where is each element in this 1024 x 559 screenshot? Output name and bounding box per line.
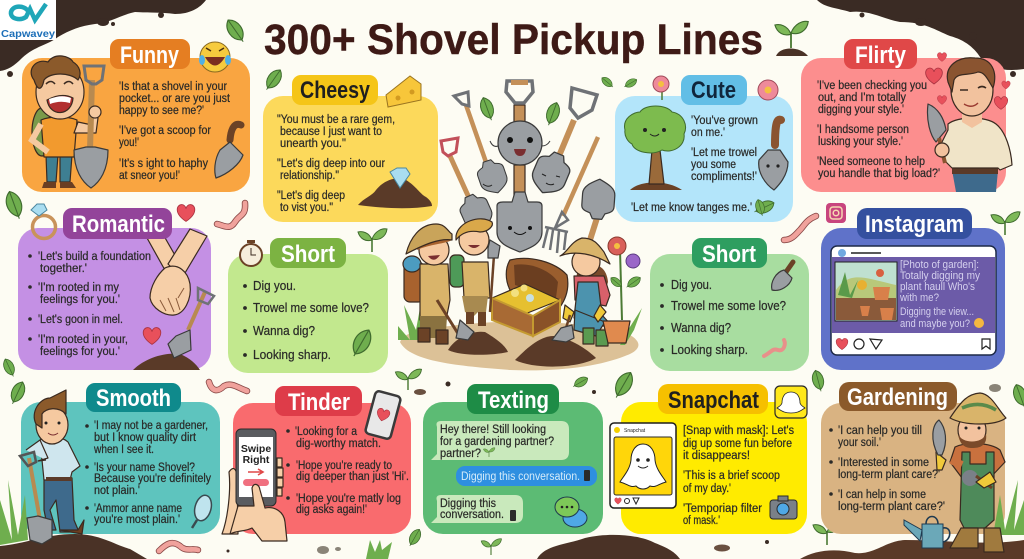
panel: Cheesy (263, 75, 438, 222)
card: Snapchat post (610, 423, 676, 508)
text: Cheesy lines (277, 114, 395, 214)
icon: camera (770, 496, 797, 519)
text: Snapchat lines (683, 425, 794, 527)
panel: Snapchat (610, 384, 807, 534)
text: Cute lines: compliments!' (691, 171, 757, 183)
text: Smooth lines: 'Is your name Shovel? (94, 462, 195, 474)
text: Tinder lines: 'Looking for a (295, 426, 358, 438)
heading: Snapchat: Snapchat (668, 387, 759, 414)
text: Flirty lines: digging your style.' (818, 104, 904, 116)
illustration: pointing hand (230, 458, 287, 541)
icon: stopwatch (240, 240, 262, 266)
icon: trowel with face (759, 120, 788, 190)
grass (398, 305, 642, 345)
text: Snapchat lines: of mask.' (683, 515, 720, 527)
text: Flirty lines: 'Need someone to help (817, 156, 925, 168)
text: Cute lines: 'You've grown (691, 115, 758, 127)
soil: bottom left (0, 534, 147, 559)
post caption: [Photo of garden]: (900, 259, 979, 271)
panel: Short (right) (650, 238, 809, 371)
panel: Instagram (821, 208, 1005, 370)
text: Romantic lines: together.' (40, 263, 87, 275)
panel: Texting (423, 384, 603, 534)
icon: worm (217, 203, 245, 227)
icon: worm (209, 382, 247, 391)
heading: Romantic: Romantic (72, 211, 165, 238)
heading: Texting: Texting (478, 387, 549, 414)
spade (581, 178, 616, 240)
soil: top left (0, 0, 206, 77)
text: Cheesy lines: to vist you." (280, 202, 333, 214)
text: Cute lines: you some (691, 159, 736, 171)
heading: Flirty: Flirty (855, 42, 907, 69)
title: 300+ Shovel Pickup Lines (264, 16, 763, 64)
panel: Gardening (821, 382, 1005, 534)
text: Tinder lines: 'Hope you're ready to (296, 460, 392, 472)
character: explorer kid left (403, 224, 474, 344)
text: Short lines: Looking sharp. (671, 343, 748, 357)
icon: watering can (904, 516, 950, 548)
illustration: holding hands (142, 229, 207, 315)
text: Funny lines: you!' (119, 137, 139, 149)
text: Smooth lines (85, 420, 211, 526)
character: smooth man with shovel (20, 390, 84, 544)
heading: Short: Short (281, 241, 335, 268)
panel: Cute (615, 75, 793, 222)
text: Tinder lines (286, 426, 409, 516)
text: Flirty lines: 'I've been checking you (817, 80, 927, 92)
grass (366, 540, 392, 559)
icon: flower left (653, 76, 669, 100)
icon: leaves (752, 198, 776, 217)
illustration: treasure chest (492, 258, 568, 336)
text: Smooth lines: 'I may not be a gardener, (94, 420, 208, 432)
text: Cheesy lines: "Let's dig deep into our (277, 158, 385, 170)
text: Smooth lines: Because you're definitely (94, 473, 211, 485)
icon: hand mirror (192, 493, 214, 528)
heading: Funny: Funny (120, 42, 180, 69)
text: Gardening lines: 'I can help you till (838, 425, 922, 437)
icon: leaf (347, 326, 375, 360)
icon: Snapchat logo (775, 386, 807, 418)
icon: heart (177, 205, 195, 221)
panel: Flirty (801, 39, 1012, 192)
message bubble 1: partner? (440, 448, 481, 460)
illustration: phone with Swipe Right: Swipe (241, 443, 271, 455)
text: Romantic lines: 'I'm rooted in your, (38, 334, 128, 346)
post caption: and maybe you? (900, 318, 970, 330)
text: Smooth lines: but I know quality dirt (94, 432, 197, 444)
text: Short lines (660, 278, 786, 357)
garden fork (543, 137, 598, 253)
text: Smooth lines: not plain.' (94, 485, 140, 497)
panel: Funny (22, 39, 250, 192)
text: Funny lines: pocket... or are you just (119, 93, 231, 105)
text: Cute lines (631, 115, 758, 214)
icon: dirt pile with diamond (358, 168, 432, 208)
icon: diamond ring (31, 204, 56, 238)
text: Short lines: Wanna dig? (671, 321, 731, 335)
soil: bottom right (800, 540, 1024, 559)
illustration: phone with Swipe Right: Right (243, 454, 270, 466)
post action icons (836, 338, 990, 350)
icon: trowel (215, 124, 243, 178)
heading: Short: Short (702, 241, 756, 268)
shovel: grey handle (454, 92, 511, 197)
character: gardener (933, 393, 1006, 552)
icon: flower right (758, 80, 778, 100)
illustration: dirt mounds (448, 332, 596, 367)
grass (994, 480, 1024, 535)
panel: Smooth (21, 383, 220, 534)
text: Cheesy lines: relationship." (280, 170, 339, 182)
text: Gardening lines: 'Interested in some (838, 457, 929, 469)
post caption: Totally digging my (900, 270, 980, 282)
text: Smooth lines: you're most plain.' (94, 514, 180, 526)
text: Cheesy lines: "Let's dig deep (277, 190, 345, 202)
text: Flirty lines: you handle that big load?' (818, 168, 940, 180)
icon: worm (764, 340, 785, 356)
illustration: dirt and shovel (133, 288, 214, 370)
illustration: phone with Swipe Right (236, 429, 276, 506)
illustration: shovels with faces (441, 80, 616, 253)
heading: Smooth: Smooth (96, 385, 171, 412)
icon: chat bubbles (555, 497, 587, 527)
text: Cute lines: 'Let me trowel (691, 147, 757, 159)
text: Flirty lines: out, and I'm totally (818, 92, 906, 104)
message bubble 1 (431, 421, 569, 460)
soil: bottom middle (537, 535, 680, 559)
text: Snapchat lines: dig up some fun before (683, 438, 792, 450)
heading: Tinder: Tinder (288, 389, 350, 416)
pebbles (226, 382, 1001, 554)
character: girl gardener (552, 238, 612, 346)
character: winking man with trowel (927, 58, 1012, 192)
message bubble 2: Digging this conversation. (461, 471, 580, 483)
text: Snapchat lines: 'Temporiap filter (683, 503, 762, 515)
text: Romantic lines: 'Let's goon in mel. (38, 314, 123, 326)
icon: smiling tree (625, 106, 686, 190)
icon: trowel (772, 262, 793, 290)
text: Gardening lines: long-term plant care?' (838, 501, 945, 513)
text: Flirty lines (817, 80, 940, 180)
heading: Cute: Cute (691, 77, 736, 104)
icon: worm (159, 543, 198, 551)
text: Funny lines (119, 81, 231, 182)
illustration: hand left (222, 469, 238, 534)
text: Snapchat lines: 'This is a brief scoop (683, 470, 780, 482)
text: Snapchat lines: of my day.' (683, 483, 731, 495)
panel: Tinder (222, 386, 411, 541)
text: Romantic lines: feelings for you.' (40, 346, 120, 358)
text: Tinder lines: 'Hope you're matly log (296, 493, 401, 505)
icon: laughing emoji (199, 42, 231, 72)
shovel: right with face (527, 88, 597, 199)
logo (0, 0, 56, 40)
message bubble 3 (431, 495, 523, 523)
text: Funny lines: happy to see me?' (119, 105, 204, 117)
dirt ground (400, 322, 638, 370)
text: Short lines (243, 279, 369, 362)
text: Cheesy lines: "You must be a rare gem, (277, 114, 395, 126)
text: Short lines: Wanna dig? (253, 324, 315, 338)
icon: Instagram logo (826, 203, 846, 223)
text: Romantic lines: 'Let's build a foundation (38, 251, 151, 263)
heading: Cheesy: Cheesy (300, 77, 371, 104)
text: Romantic lines: feelings for you.' (40, 294, 120, 306)
icon: potted flowers (603, 237, 643, 343)
icon: heart in panel (143, 328, 161, 344)
text: Funny lines: at sneor you!' (119, 170, 180, 182)
text: Gardening lines (829, 425, 945, 513)
text: Short lines: Dig you. (253, 279, 296, 293)
text: Snapchat lines: it disappears! (683, 450, 750, 462)
text: Flirty lines: lusking your style.' (818, 136, 903, 148)
text: Tinder lines: dig-worthy match. (296, 438, 381, 450)
text: Funny lines: 'It's s ight to haphy (119, 158, 208, 170)
text: Romantic lines (28, 251, 151, 358)
photo of garden (835, 262, 897, 321)
panel: Short (left) (228, 238, 388, 373)
post caption: with me? (899, 292, 939, 304)
text: Smooth lines: when I see it. (93, 444, 154, 456)
shovel: round face (490, 80, 550, 252)
icon: worm (784, 216, 816, 240)
post caption: Digging the view... (900, 306, 974, 318)
heading: Instagram: Instagram (865, 211, 964, 238)
text: Cute lines: 'Let me know tanges me.' (631, 202, 752, 214)
character: explorer kid right (450, 219, 500, 326)
post caption: plant haull Who's (900, 281, 975, 293)
grass (0, 480, 28, 545)
text: Short lines: Dig you. (671, 278, 712, 292)
text: Cute lines: on me.' (691, 127, 725, 139)
text: Short lines: Trowel me some love? (671, 299, 786, 313)
character: laughing man with shovel (31, 56, 108, 188)
message bubble 1: for a gardening partner? (440, 436, 554, 448)
soil: top right (817, 0, 1024, 77)
post caption (899, 259, 984, 330)
text: Flirty lines: 'I handsome person (817, 124, 909, 136)
text: Snapchat lines: [Snap with mask]: Let's (683, 425, 794, 437)
icon: cheese (386, 76, 421, 107)
text: Gardening lines: 'I can help in some (838, 489, 926, 501)
message bubble 2 (456, 466, 597, 486)
text: Romantic lines: 'I'm rooted in my (38, 282, 119, 294)
text: Smooth lines: 'Ammor anne name (94, 503, 182, 515)
text: Short lines: Trowel me some love? (253, 301, 369, 315)
shovel: red handle (441, 138, 497, 234)
card: Instagram post (831, 246, 996, 355)
logo: Capwavey (1, 28, 55, 40)
message bubble 3: Digging this (440, 498, 496, 510)
text: Short lines: Looking sharp. (253, 348, 331, 362)
panel: Romantic (18, 204, 214, 370)
icon: phone with heart (365, 390, 401, 440)
text: Cheesy lines: because I just want to (280, 126, 382, 138)
icon: hearts (926, 53, 1010, 109)
message bubble 1: Hey there! Still looking (440, 424, 546, 436)
text: Gardening lines: long-term plant care?' (838, 469, 940, 481)
heading: Gardening: Gardening (847, 384, 948, 411)
text: Gardening lines: your soil.' (838, 437, 881, 449)
card: Snapchat post: Snapchat (624, 428, 646, 434)
icon: sprout by title (775, 21, 808, 56)
text: Tinder lines: dig deeper than just 'Hi'. (296, 471, 409, 483)
text: Funny lines: 'I've got a scoop for (119, 125, 211, 137)
text: Funny lines: 'Is that a shovel in your (119, 81, 227, 93)
text: Tinder lines: dig asks again!' (296, 504, 367, 516)
text: Cheesy lines: unearth you." (280, 138, 346, 150)
message bubble 3: conversation. (440, 509, 504, 521)
